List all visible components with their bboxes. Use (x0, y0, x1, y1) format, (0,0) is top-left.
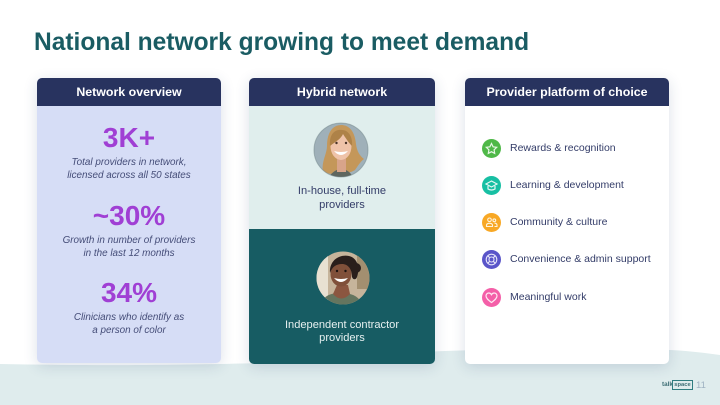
stat: ~30%: ~30% (93, 200, 165, 231)
photo: independent contractor (316, 252, 370, 304)
heading: hybrid network: Hybrid network (297, 85, 387, 99)
text: learning: Learning & development (510, 179, 624, 191)
stat: 34%: 34% (101, 277, 157, 308)
caption: growth: Growth in number of providers (63, 235, 195, 246)
icon: lifebuoy (482, 250, 501, 269)
item: community (482, 213, 607, 232)
item: convenience (482, 250, 651, 269)
item: learning (482, 176, 624, 195)
heading: hybrid network (249, 78, 435, 106)
caption: growth (63, 235, 196, 259)
logo word: space: space (674, 382, 691, 388)
stat: 3K+: 3K+ (103, 122, 155, 153)
item: rewards (482, 139, 616, 158)
caption: clinicians (74, 312, 184, 336)
label: in-house providers (298, 185, 386, 211)
caption: clinicians: a person of color (92, 325, 166, 336)
title: National network growing to meet demand (34, 29, 529, 56)
text: rewards: Rewards & recognition (510, 142, 616, 154)
text: community: Community & culture (510, 216, 607, 228)
caption: total providers (67, 157, 191, 181)
label: in-house providers: providers (319, 199, 365, 211)
heading: provider platform of choice: Provider platform of choice (486, 85, 648, 99)
panel: hybrid network (249, 78, 435, 364)
label: independent contractor providers (285, 318, 399, 344)
icon: people (482, 213, 501, 232)
photo: in-house provider (314, 122, 368, 178)
icon: graduation cap (482, 176, 501, 195)
heading: network overview (37, 78, 221, 106)
label: independent contractor providers: providers (319, 332, 365, 344)
heading: provider platform of choice (465, 78, 669, 106)
text: meaningful work: Meaningful work (510, 291, 586, 303)
caption: total providers: Total providers in network, (72, 157, 186, 168)
logo word: space (672, 380, 693, 390)
heading: network overview: Network overview (76, 85, 182, 99)
icon: star (482, 139, 501, 158)
section: independent contractor background (249, 229, 435, 364)
text: convenience: Convenience & admin support (510, 253, 651, 265)
panel: network overview (37, 78, 221, 363)
panel: provider platform of choice (465, 78, 669, 364)
logo: talkspace (662, 380, 693, 390)
caption: clinicians: Clinicians who identify as (74, 312, 184, 323)
caption: total providers: licensed across all 50 states (67, 170, 191, 181)
label: in-house providers: In-house, full-time (298, 185, 386, 197)
caption: growth: in the last 12 months (83, 248, 175, 259)
icon: heart (482, 288, 501, 307)
label: independent contractor providers: Independent contractor (285, 318, 399, 330)
item: meaningful work (482, 288, 586, 307)
page number: 11 (696, 380, 706, 391)
logo word: talk: talk (662, 381, 673, 388)
